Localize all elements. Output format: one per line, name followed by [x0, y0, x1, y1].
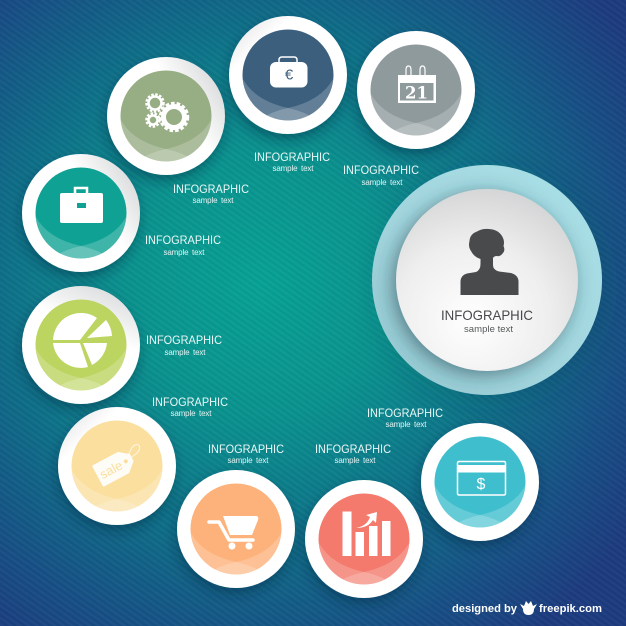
- central sample text: sample text: [464, 324, 513, 335]
- label: sale tag: INFOGRAPHIC: [152, 395, 228, 409]
- label: shopping cart: sample text: [228, 456, 269, 465]
- label: shopping cart: [208, 442, 284, 465]
- panel: credit card: [421, 423, 539, 541]
- label: credit card: [367, 406, 443, 429]
- watermark: designed by freepik.com: [452, 601, 602, 615]
- label: calendar: sample text: [362, 178, 403, 187]
- icon: calendar: 21: [405, 84, 428, 102]
- label: calendar: [343, 163, 419, 187]
- panel: shopping cart: [177, 470, 295, 588]
- label: briefcase: sample text: [164, 248, 205, 257]
- label: credit card: sample text: [386, 420, 427, 429]
- label: gears: [173, 182, 249, 205]
- panel: calendar: [357, 31, 475, 149]
- watermark: designed by freepik.com: designed by: [452, 603, 518, 615]
- panel: pie chart: [22, 286, 140, 404]
- panel: gears: [107, 57, 225, 175]
- label: pie chart: [146, 333, 222, 357]
- label: pie chart: INFOGRAPHIC: [146, 333, 222, 347]
- icon: shopping cart: [209, 516, 258, 550]
- icon: rising bar chart: [342, 512, 390, 556]
- label: briefcase: INFOGRAPHIC: [145, 233, 221, 247]
- panel: briefcase: [22, 154, 140, 272]
- icon: sale tag: sale: [97, 458, 125, 482]
- label: calendar: INFOGRAPHIC: [343, 163, 419, 177]
- icon: gears: [146, 94, 188, 130]
- label: gears: sample text: [192, 196, 234, 205]
- label: credit card: INFOGRAPHIC: [367, 406, 443, 420]
- label: briefcase: [145, 233, 221, 257]
- label: bar chart: sample text: [334, 456, 376, 465]
- label: bar chart: INFOGRAPHIC: [315, 442, 391, 456]
- label: pie chart: sample text: [164, 348, 206, 357]
- icon: briefcase: [60, 188, 103, 223]
- label: bar chart: [315, 442, 391, 465]
- icon: pie chart: [53, 313, 112, 368]
- panel: euro briefcase: [229, 16, 347, 134]
- outer halo ring: [372, 165, 602, 395]
- label: sale tag: sample text: [170, 409, 212, 418]
- white disc: [396, 189, 578, 371]
- label: euro case: [254, 150, 330, 173]
- label: shopping cart: INFOGRAPHIC: [208, 442, 284, 456]
- icon: dollar card: $: [477, 476, 486, 493]
- panel: sale tag: [58, 407, 176, 525]
- label: gears: INFOGRAPHIC: [173, 182, 249, 196]
- icon: euro case: €: [285, 66, 294, 84]
- panel: central profile circle: [372, 165, 602, 395]
- label: euro case: INFOGRAPHIC: [254, 150, 330, 164]
- label: euro case: sample text: [272, 164, 314, 173]
- icon: person silhouette: [460, 229, 518, 295]
- label: sale tag: [152, 395, 228, 418]
- panel: bar chart: [305, 480, 423, 598]
- central heading: INFOGRAPHIC: [441, 307, 533, 323]
- watermark: designed by freepik.com: freepik.com: [539, 603, 602, 615]
